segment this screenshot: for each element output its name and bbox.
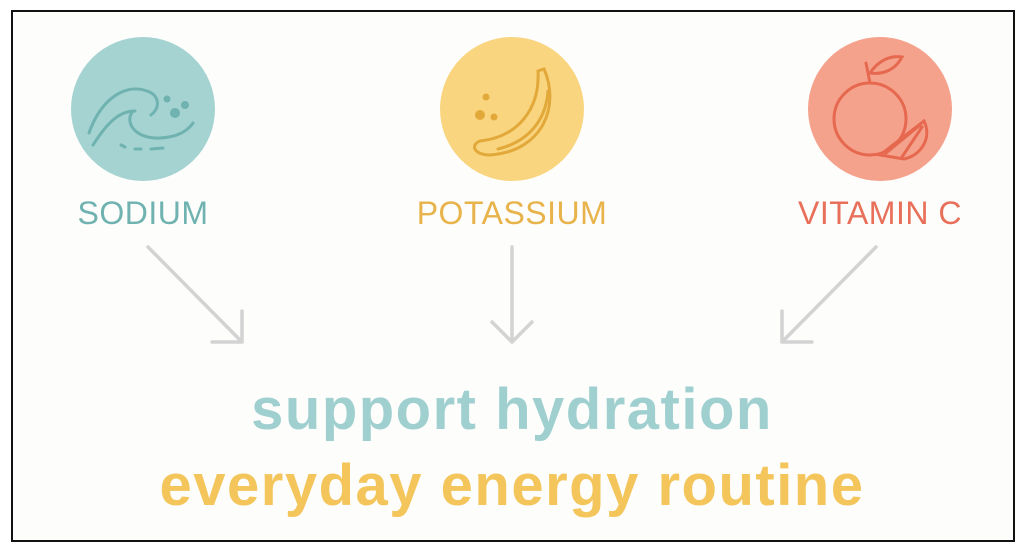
headline: everyday energy routine: everyday energy routine	[159, 453, 864, 518]
headline: support hydration: support hydration	[251, 377, 773, 442]
label: potassium: POTASSIUM	[417, 195, 607, 231]
arrow: potassium	[492, 247, 532, 342]
arrow: vitamin c	[782, 247, 876, 342]
icon: sodium wave	[71, 37, 215, 181]
icon: vitamin c orange	[808, 37, 952, 181]
icon: potassium banana	[440, 37, 584, 181]
label: vitamin c: VITAMIN C	[798, 195, 962, 231]
label: sodium: SODIUM	[78, 195, 208, 231]
arrow: sodium	[148, 247, 242, 342]
